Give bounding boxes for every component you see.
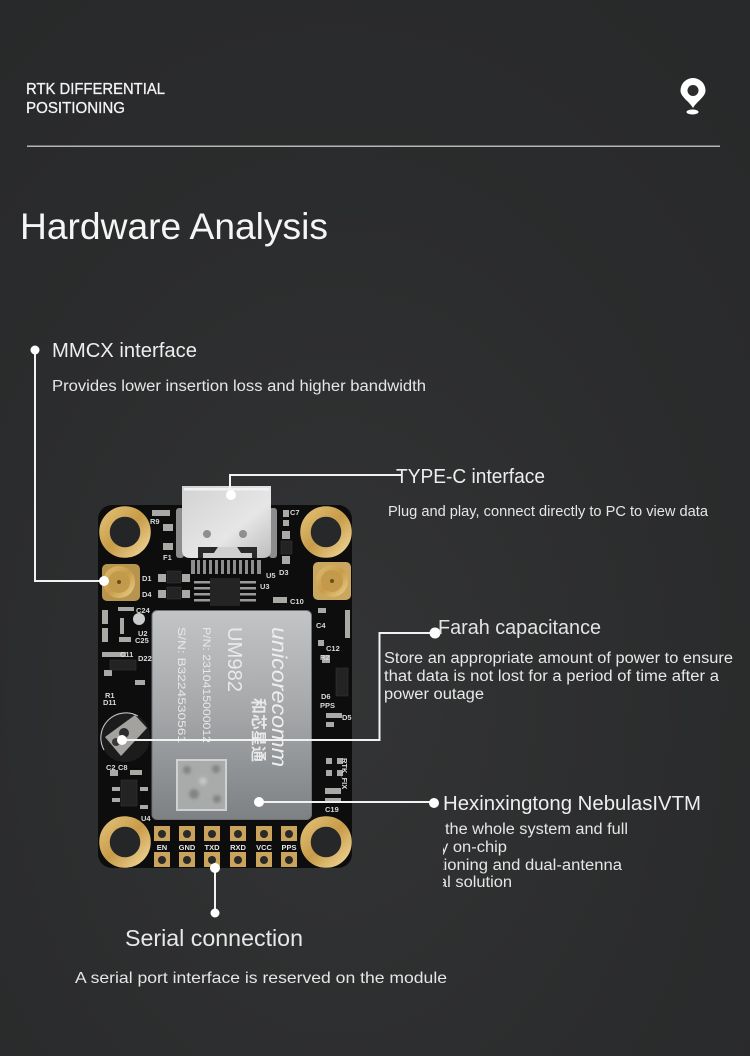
black inductor chips	[110, 541, 348, 806]
leader line: Serial	[210, 863, 220, 918]
silkscreen labels: D5	[342, 713, 352, 722]
silkscreen labels: PPS	[320, 701, 335, 710]
PCB module board	[98, 486, 352, 868]
UM982 GNSS module	[152, 610, 312, 820]
silkscreen labels: D6	[321, 692, 331, 701]
silkscreen labels: D1	[142, 574, 152, 583]
silkscreen labels: R2	[320, 653, 330, 662]
silkscreen labels: U5	[266, 571, 276, 580]
pin header pads: VCC	[256, 843, 272, 852]
module printed text: unicorecomm	[267, 627, 290, 767]
silkscreen labels: C19	[325, 805, 339, 814]
description: Store an appropriate amount of power to ensure	[384, 650, 733, 667]
leader line: Hexinxingtong	[254, 797, 439, 808]
board body	[98, 505, 352, 868]
silkscreen labels: D11	[103, 698, 116, 707]
module printed text: P/N: 2310415000012	[200, 627, 212, 743]
silkscreen labels: F1	[163, 553, 172, 562]
silver pad	[133, 613, 145, 625]
callout: Serial connection: A serial port interface is reserved on the module	[75, 970, 447, 987]
description, clipped: al solution	[438, 874, 512, 891]
module printed text: S/N: B3224530561	[175, 627, 187, 743]
silkscreen labels: D3	[279, 568, 289, 577]
small components	[102, 510, 350, 809]
leader line: Farah	[117, 628, 440, 745]
silkscreen labels: R1	[105, 691, 115, 700]
silkscreen labels: C25	[135, 636, 149, 645]
pin header pads: PPS	[281, 843, 297, 852]
mounting holes	[104, 512, 346, 862]
pin header pads: RXD	[230, 843, 246, 852]
leader line: TYPE-C	[226, 475, 401, 500]
callout: Farah capacitance: Farah capacitance	[438, 616, 601, 639]
pin header pads: GND	[179, 843, 196, 852]
callout: Farah capacitance	[117, 616, 733, 745]
header label	[26, 81, 165, 117]
leader line: MMCX	[30, 346, 109, 586]
description, clipped: y on-chip	[440, 839, 507, 856]
farad capacitor	[100, 712, 150, 762]
callout: TYPE-C interface: Plug and play, connect directly to PC to view data	[388, 504, 709, 520]
pin header pads: EN	[157, 843, 167, 852]
description, clipped: tioning and dual-antenna	[439, 857, 622, 874]
description: power outage	[384, 686, 484, 703]
header label: POSITIONING	[26, 100, 125, 117]
silkscreen labels: R9	[150, 517, 160, 526]
callout: Hexinxingtong NebulasIVTM	[254, 792, 701, 891]
silkscreen labels: C12	[326, 644, 340, 653]
silkscreen labels: C7	[290, 508, 300, 517]
description, clipped: the whole system and full	[445, 821, 628, 838]
silkscreen labels: D4	[142, 590, 152, 599]
callout: MMCX interface: Provides lower insertion loss and higher bandwidth	[52, 378, 426, 395]
silkscreen labels: U4	[141, 814, 151, 823]
pin header pads	[154, 826, 297, 867]
callout: Serial connection: Serial connection	[125, 925, 303, 951]
description: that data is not lost for a period of time after a	[384, 668, 719, 685]
pins	[191, 560, 261, 574]
module printed text: 和芯星通	[249, 698, 267, 762]
module printed text: UM982	[223, 627, 245, 692]
silkscreen labels: C8	[118, 763, 128, 772]
callout: TYPE-C interface: TYPE-C interface	[396, 466, 545, 488]
pin header pads: TXD	[204, 843, 220, 852]
callout: Hexinxingtong NebulasIVTM: Hexinxingtong NebulasIVTM	[443, 792, 701, 815]
silkscreen labels: RTK_FIX	[340, 758, 349, 789]
silkscreen labels: U3	[260, 582, 270, 591]
callout: Serial connection	[75, 863, 447, 987]
icon: location pin	[680, 78, 706, 114]
module printed text	[175, 627, 290, 767]
callout: MMCX interface: MMCX interface	[52, 340, 197, 362]
silkscreen labels	[103, 508, 352, 823]
title: Hardware Analysis	[20, 206, 328, 247]
silkscreen labels: U2	[138, 629, 148, 638]
silkscreen labels: C2	[106, 763, 116, 772]
callout: TYPE-C interface	[226, 466, 709, 520]
description	[384, 650, 733, 703]
silkscreen labels: C4	[316, 621, 326, 630]
silkscreen labels: D22	[138, 654, 152, 663]
IC U3	[194, 578, 256, 606]
silkscreen labels: C24	[136, 606, 151, 615]
silkscreen labels: C11	[120, 650, 133, 659]
header label: RTK DIFFERENTIAL	[26, 81, 165, 98]
description, clipped	[443, 822, 627, 887]
MMCX connectors	[102, 562, 351, 601]
QR code	[176, 759, 227, 811]
silkscreen labels: C10	[290, 597, 304, 606]
USB-C connector	[176, 486, 277, 574]
callout: MMCX interface	[30, 340, 426, 586]
